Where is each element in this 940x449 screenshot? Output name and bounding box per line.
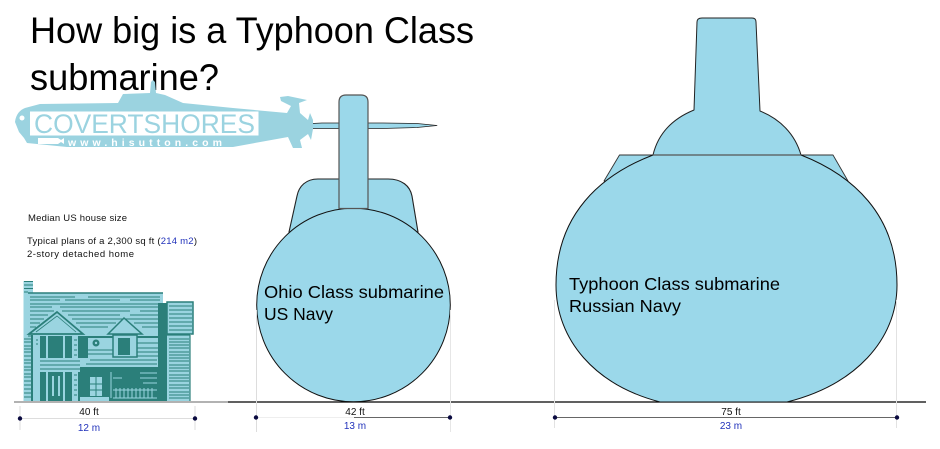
dimension: Typhoon beam: 23 m	[720, 421, 742, 432]
dimension: Ohio beam: 13 m	[344, 421, 366, 432]
logo url: www.hisutton.com	[67, 137, 222, 149]
hull	[556, 155, 897, 402]
title: submarine?	[30, 57, 219, 98]
dimension: house width: 40 ft	[79, 407, 99, 418]
title: How big is a Typhoon Class	[30, 10, 474, 51]
bay window block	[40, 336, 80, 401]
main roof	[28, 293, 163, 335]
ground line	[14, 401, 926, 403]
right gable	[108, 318, 142, 334]
house description text: Median US house size	[28, 213, 127, 224]
roof and siding lines	[24, 282, 192, 398]
superstructure	[604, 155, 848, 181]
house description text	[27, 213, 197, 260]
Typhoon class label	[569, 274, 780, 316]
submarine silhouette	[15, 80, 313, 148]
dimension: Typhoon beam: 75 ft	[721, 407, 741, 418]
dimension: house width	[18, 406, 197, 434]
porch	[80, 368, 158, 401]
upper wall	[80, 335, 158, 359]
left gable	[29, 312, 83, 334]
Ohio class label: Ohio Class submarine	[264, 282, 444, 302]
bay light frames	[40, 335, 80, 401]
torpedo icon	[38, 138, 64, 144]
logo wordmark: COVERTSHORES	[34, 109, 255, 139]
roof edge column	[158, 303, 167, 401]
chimney	[24, 281, 33, 401]
house description text: 2-story detached home	[27, 249, 134, 260]
bay lower window	[52, 376, 60, 396]
sail	[339, 95, 368, 208]
dimension: Typhoon beam	[553, 300, 899, 432]
side roof	[167, 302, 193, 334]
Ohio class label	[264, 282, 444, 324]
porthole	[20, 116, 24, 120]
dimension: house width: 12 m	[78, 423, 100, 434]
Typhoon class label: Russian Navy	[569, 296, 681, 316]
Typhoon class label: Typhoon Class submarine	[569, 274, 780, 294]
logo white plate	[30, 112, 258, 136]
fairing	[289, 179, 418, 232]
Covert Shores watermark logo	[15, 80, 313, 149]
Ohio class label: US Navy	[264, 304, 333, 324]
hull circle	[257, 208, 450, 402]
walls	[33, 335, 190, 401]
dimension: Ohio beam	[254, 310, 452, 432]
title	[30, 10, 474, 98]
front door	[90, 377, 102, 396]
dome and sail	[653, 18, 801, 155]
Typhoon class submarine cross-section	[556, 18, 897, 402]
porch railing	[111, 372, 157, 398]
house description text: Typical plans of a 2,300 sq ft (214 m2)	[27, 236, 197, 247]
house elevation drawing	[24, 281, 193, 401]
round window	[92, 340, 100, 346]
dormer window	[113, 335, 137, 357]
dimension: Ohio beam: 42 ft	[345, 407, 365, 418]
dive planes	[312, 123, 437, 128]
Ohio class submarine cross-section	[257, 95, 450, 402]
